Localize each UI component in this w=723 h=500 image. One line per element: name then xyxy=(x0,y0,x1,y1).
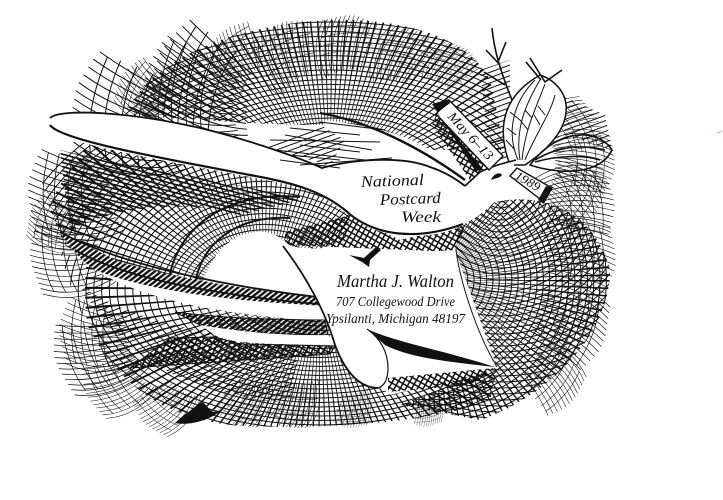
hatching beside bulb xyxy=(480,60,612,165)
flourish: top grid xyxy=(125,20,504,150)
paper speck xyxy=(717,131,722,133)
flower bulb xyxy=(503,75,612,171)
curl end xyxy=(367,329,388,388)
rope twist xyxy=(60,232,335,322)
flourish: left grid around arch xyxy=(42,142,350,282)
ribbon: May 6–13 xyxy=(432,99,503,180)
dark leaf ornament xyxy=(175,402,222,424)
flourish: right grid xyxy=(402,199,610,420)
sheet curl xyxy=(367,329,495,367)
bird feet xyxy=(349,247,381,267)
address sheet xyxy=(283,246,497,392)
National Postcard Week: Week xyxy=(401,209,442,226)
second rope strand xyxy=(175,312,328,335)
white lower sweep xyxy=(200,325,338,345)
white arch opening xyxy=(203,232,330,302)
dove xyxy=(48,113,516,236)
name: Martha J. Walton xyxy=(336,271,454,291)
lower wedge xyxy=(388,368,495,392)
wing feather hatching xyxy=(270,122,392,168)
ribbon: May 6–13: May 6–13 xyxy=(444,108,497,163)
National Postcard Week: National xyxy=(359,172,425,191)
twig xyxy=(484,28,562,100)
city and zip: Ypsilanti, Michigan 48197 xyxy=(326,312,466,327)
eye xyxy=(491,173,502,180)
flourish: outer plumes xyxy=(21,13,619,444)
band under wing xyxy=(285,215,465,252)
National Postcard Week: Postcard xyxy=(378,190,442,209)
dark lower strip xyxy=(130,337,335,368)
National Postcard Week xyxy=(359,172,442,226)
ribbon: 1989: 1989 xyxy=(512,168,544,195)
street address: 707 Collegewood Drive xyxy=(336,295,455,310)
ribbon: 1989 xyxy=(510,168,552,204)
flourish: lower grid xyxy=(61,252,497,427)
